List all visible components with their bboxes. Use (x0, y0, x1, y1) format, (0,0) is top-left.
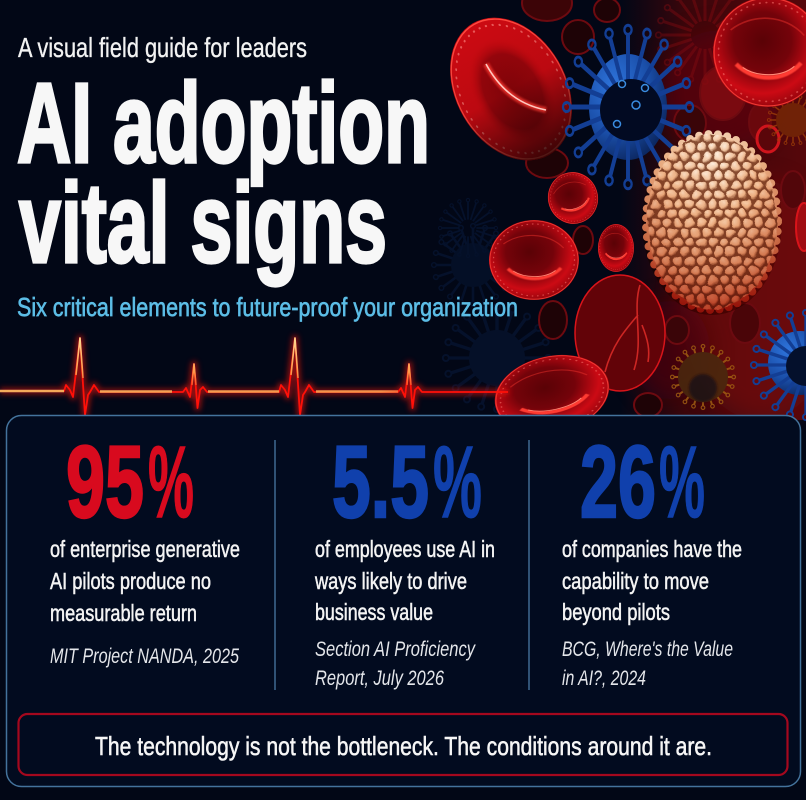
title: vital signs (19, 160, 387, 286)
background: dim blue viruses (432, 198, 551, 412)
stat source: Section AI Proficiency (315, 638, 476, 661)
icon: large red blood cell upper left (425, 0, 597, 182)
stat description: of enterprise generative (50, 536, 240, 562)
stat source: Report, July 2026 (315, 667, 444, 690)
stat source: MIT Project NANDA, 2025 (50, 645, 239, 668)
stat source: in AI?, 2024 (562, 667, 646, 690)
icon: blue virus right (751, 310, 806, 420)
icon: small red blood cell centre (598, 224, 634, 272)
kicker: A visual field guide for leaders (18, 32, 307, 63)
background: dim red virus filaments (656, 0, 754, 84)
stat source (562, 638, 733, 690)
stat description: AI pilots produce no (50, 568, 211, 594)
stat number: 5.5%: 5.5 (332, 425, 429, 539)
stat column: 5.5% (314, 425, 495, 690)
icon: orange virus behind white cell (767, 94, 806, 146)
stat source: BCG, Where's the Value (562, 638, 733, 661)
stat number: 26%: 26 (580, 425, 656, 539)
title: AI adoption (17, 60, 430, 186)
icon: red blood cell top right (713, 0, 806, 107)
stat description (562, 536, 742, 625)
stat description: of employees use AI in (315, 536, 495, 562)
stat description: of companies have the (562, 536, 742, 562)
icon: orange virus (670, 344, 736, 410)
stat number: 95%: % (148, 425, 194, 539)
background: dim red cells (522, 0, 806, 417)
stat description: beyond pilots (562, 599, 670, 625)
stat number: 95%: 95 (66, 425, 144, 539)
stat column: 95% (50, 425, 240, 668)
panel: statistics (6, 416, 800, 786)
icon: large red blood cell lower (575, 275, 665, 391)
stat description (50, 536, 240, 626)
callout (18, 714, 788, 775)
background: red tissue wash (620, 0, 806, 420)
stat description: measurable return (50, 600, 197, 626)
title (17, 60, 430, 286)
stat description: ways likely to drive (314, 568, 467, 594)
stat number: 26%: % (659, 425, 705, 539)
subtitle: Six critical elements to future-proof your organization (17, 292, 518, 322)
stat description: capability to move (562, 568, 709, 594)
icon: blue virus (563, 25, 693, 189)
stat description: business value (315, 599, 433, 625)
icon: small red blood cell (541, 165, 605, 231)
heartbeat line (0, 338, 508, 415)
icon: red blood cell at panel edge (487, 345, 617, 443)
stat number: 5.5%: % (433, 425, 482, 539)
stat column: 26% (562, 425, 742, 690)
stat source (315, 638, 476, 690)
stat description (314, 536, 495, 625)
icon: white blood cell (642, 129, 782, 315)
icon: medium red blood cell (489, 220, 579, 300)
